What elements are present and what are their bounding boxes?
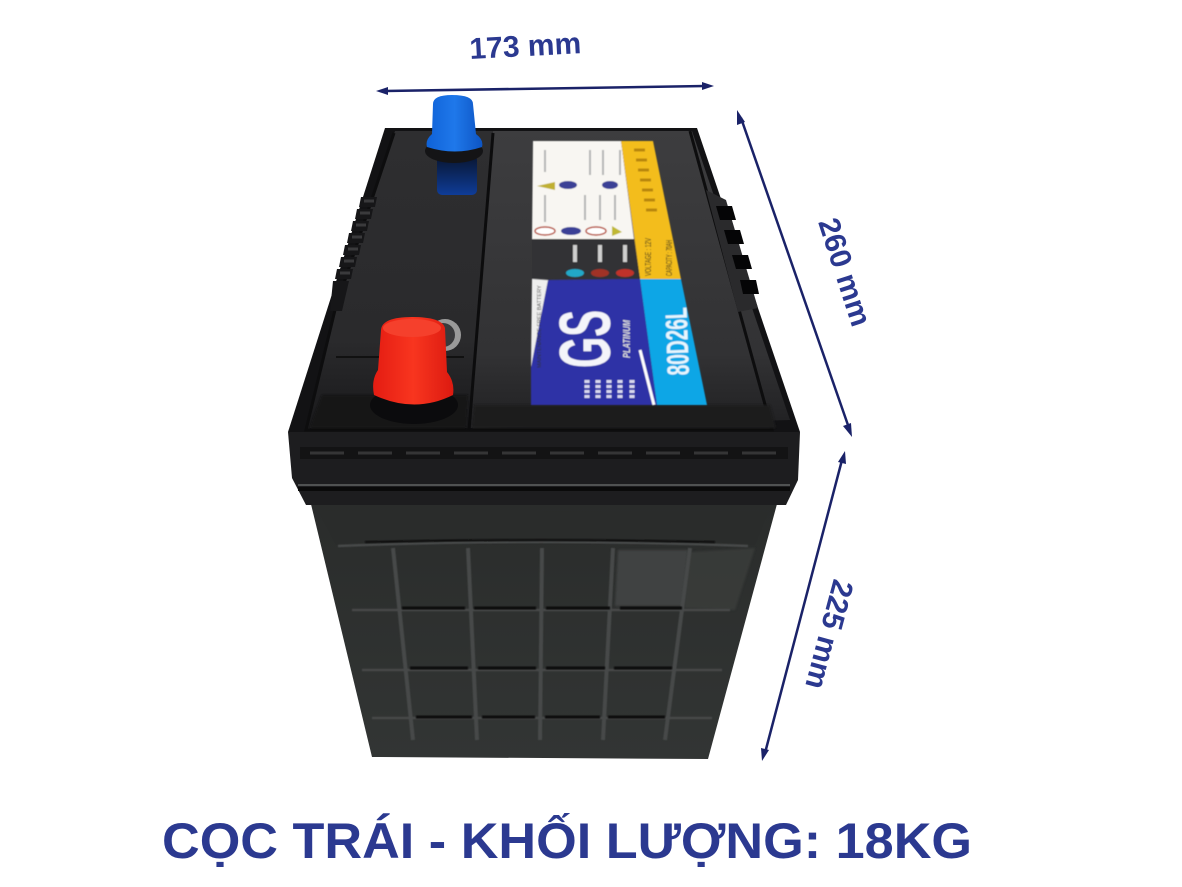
icon: red terminal — [370, 317, 461, 424]
label texts — [537, 238, 696, 376]
lid front band — [288, 432, 800, 505]
arrow: width 173 mm — [376, 82, 714, 95]
lid top — [288, 128, 800, 432]
label warnings panel — [532, 141, 634, 239]
label: 260 mm: 260 mm — [811, 214, 877, 330]
grid ribs — [338, 542, 748, 740]
grid shadow gaps — [365, 540, 715, 717]
title: CỌC TRÁI - KHỐI LƯỢNG: 18KG — [162, 812, 972, 869]
arrow: length 260 mm — [737, 110, 852, 437]
label texts: 80D26L — [659, 307, 696, 376]
warning icons — [535, 181, 634, 277]
label: 225 mm: 225 mm — [798, 576, 859, 693]
label texts: GS — [546, 310, 626, 368]
battery — [288, 95, 800, 759]
side vents — [330, 190, 759, 312]
label: 173 mm: 173 mm — [469, 27, 582, 66]
product label — [531, 141, 707, 405]
label dark panel — [532, 239, 640, 279]
label texts: MAINTENANCE FREE BATTERY — [537, 285, 543, 368]
label cyan panel — [640, 279, 707, 405]
arrow: height 225 mm — [761, 451, 846, 761]
label texts: PLATINUM — [621, 320, 633, 358]
label texts: VOLTAGE : 12V — [644, 238, 653, 276]
label yellow panel — [621, 141, 681, 279]
label texts: CAPACITY : 70AH — [665, 240, 674, 276]
label blue panel — [531, 279, 657, 405]
battery body — [310, 500, 777, 759]
icon: blue terminal — [425, 95, 483, 195]
